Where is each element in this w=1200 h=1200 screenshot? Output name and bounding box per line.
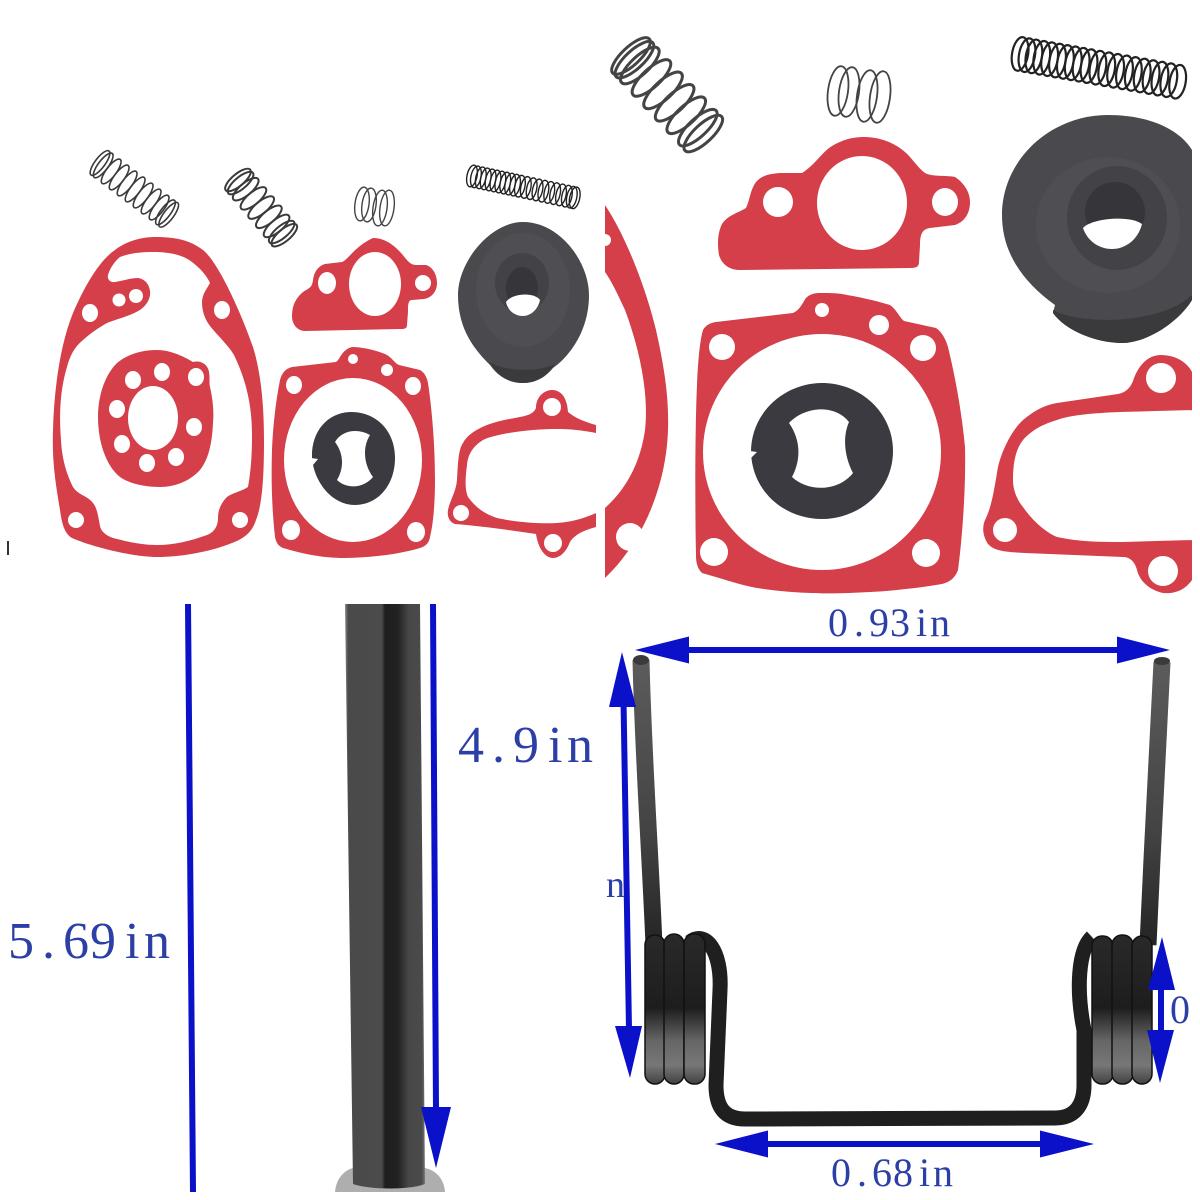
inner round gasket holes bbox=[109, 363, 204, 472]
square gasket holes bbox=[282, 354, 425, 542]
detail square gasket bbox=[695, 293, 965, 593]
large gasket holes bbox=[68, 289, 248, 528]
detail oval gasket bbox=[983, 355, 1192, 593]
square gasket bbox=[272, 347, 435, 558]
arrow 0.93in bbox=[635, 636, 1170, 664]
spring 2 bbox=[222, 165, 300, 250]
black washer notch bbox=[311, 458, 318, 465]
detail spring 2 bbox=[825, 65, 894, 124]
dimension line 5.69in bbox=[188, 604, 193, 1192]
top gasket bbox=[292, 238, 437, 331]
label 4.9in: 4.9in bbox=[458, 717, 593, 774]
arrow left height bbox=[609, 652, 642, 1078]
label 0.93in: 0.93in bbox=[828, 600, 950, 645]
panel: torsion spring dimensions bbox=[606, 600, 1190, 1195]
panel: gasket detail zoom bbox=[599, 32, 1192, 593]
detail large gasket holes bbox=[599, 234, 644, 551]
panel: rod dimensions bbox=[8, 604, 593, 1192]
large gasket bbox=[53, 237, 264, 557]
detail square gasket holes bbox=[700, 303, 940, 567]
black washer bbox=[312, 412, 395, 505]
detail washer notch bbox=[750, 451, 757, 458]
inner round gasket bbox=[98, 350, 213, 487]
oval gasket bbox=[448, 390, 596, 558]
label 5.69in: 5.69in bbox=[8, 913, 170, 970]
detail spring 3 bbox=[1009, 36, 1188, 100]
detail black washer bbox=[751, 383, 893, 519]
spring 4 bbox=[465, 164, 582, 210]
detail large gasket edge bbox=[605, 205, 668, 578]
torsion spring bbox=[633, 655, 1170, 1119]
rod bbox=[335, 604, 445, 1192]
detail top gasket bbox=[718, 137, 970, 270]
spring 3 bbox=[353, 186, 396, 227]
spring 1 bbox=[87, 148, 182, 230]
label 0.68in: 0.68in bbox=[831, 1150, 953, 1195]
panel: gasket kit overview bbox=[7, 148, 596, 558]
edge mark bbox=[7, 541, 9, 555]
label n: n bbox=[606, 864, 625, 906]
detail spring 1 bbox=[607, 32, 728, 157]
label 0: 0 bbox=[1170, 987, 1190, 1032]
detail rubber cup bbox=[1002, 115, 1192, 343]
arrow 0.68in bbox=[715, 1130, 1094, 1158]
dimension arrow 4.9in bbox=[421, 604, 451, 1168]
arrow right height bbox=[1147, 937, 1175, 1083]
detail oval gasket holes bbox=[993, 363, 1178, 586]
rubber cup bbox=[458, 222, 589, 383]
oval gasket holes bbox=[453, 398, 562, 552]
